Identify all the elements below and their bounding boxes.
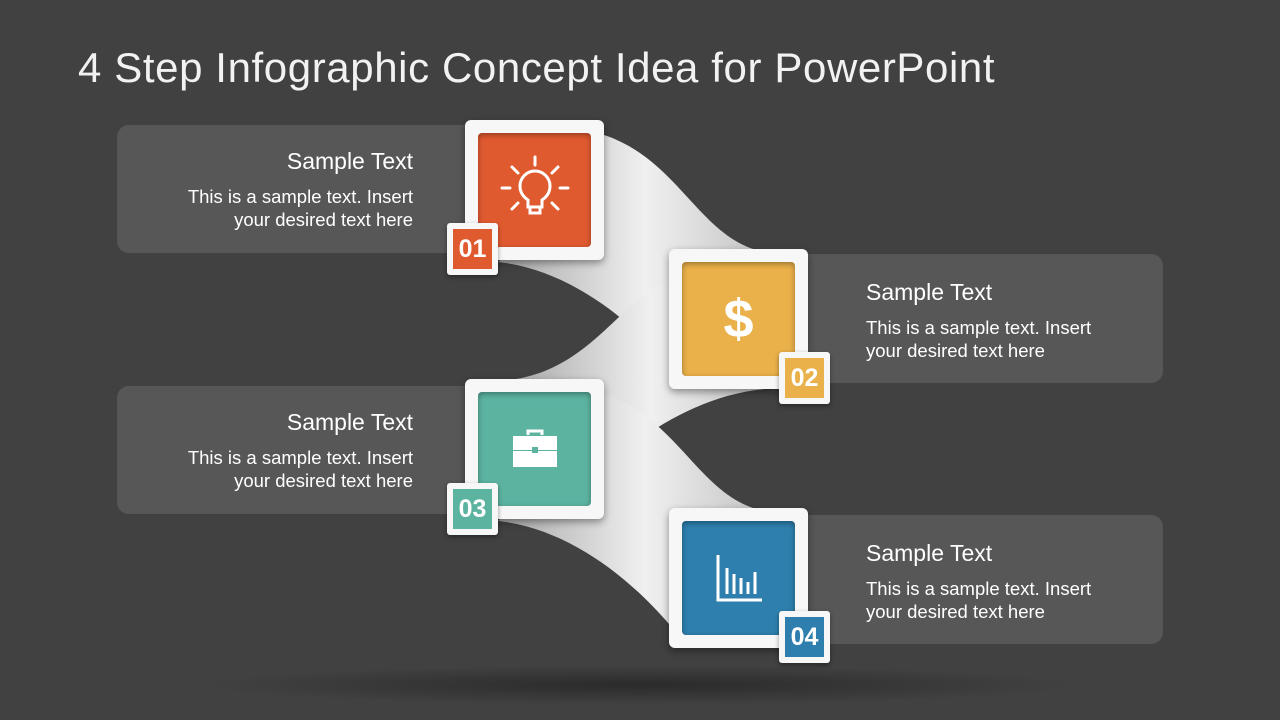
title: 4 Step Infographic Concept Idea for PowerPoint: [78, 44, 995, 91]
tile 4: [669, 508, 808, 648]
text 4: Sample Text: [866, 540, 992, 566]
panel 3: [117, 386, 517, 514]
badge 03: 03: [459, 495, 486, 523]
tile 2: [669, 249, 808, 389]
icon: bulb: [500, 156, 570, 214]
text 2: your desired text here: [866, 340, 1045, 361]
icon: bar chart: [716, 555, 762, 602]
badge 04: [779, 611, 830, 663]
text 4: [866, 540, 1091, 622]
icon: dollar: $: [723, 289, 754, 349]
panel 4: [770, 515, 1163, 644]
text 1: your desired text here: [234, 209, 413, 230]
badge 02: 02: [791, 364, 818, 392]
text 3: your desired text here: [234, 470, 413, 491]
text 1: [188, 148, 413, 230]
badge 04: 04: [791, 623, 818, 651]
icon: briefcase: [513, 430, 557, 467]
text 3: [188, 409, 413, 491]
text 1: This is a sample text. Insert: [188, 186, 413, 207]
badge 03: [447, 483, 498, 535]
text 2: Sample Text: [866, 279, 992, 305]
text 2: [866, 279, 1091, 361]
text 4: your desired text here: [866, 601, 1045, 622]
text 3: Sample Text: [287, 409, 413, 435]
text 3: This is a sample text. Insert: [188, 447, 413, 468]
tile 3: [465, 379, 604, 519]
tile 1: [465, 120, 604, 260]
bottom shadow: [200, 665, 1080, 705]
badge 01: [447, 223, 498, 275]
text 4: This is a sample text. Insert: [866, 578, 1091, 599]
panel 2: [770, 254, 1163, 383]
text 2: This is a sample text. Insert: [866, 317, 1091, 338]
panel 1: [117, 125, 517, 253]
badge 01: 01: [459, 235, 486, 263]
text 1: Sample Text: [287, 148, 413, 174]
badge 02: [779, 352, 830, 404]
